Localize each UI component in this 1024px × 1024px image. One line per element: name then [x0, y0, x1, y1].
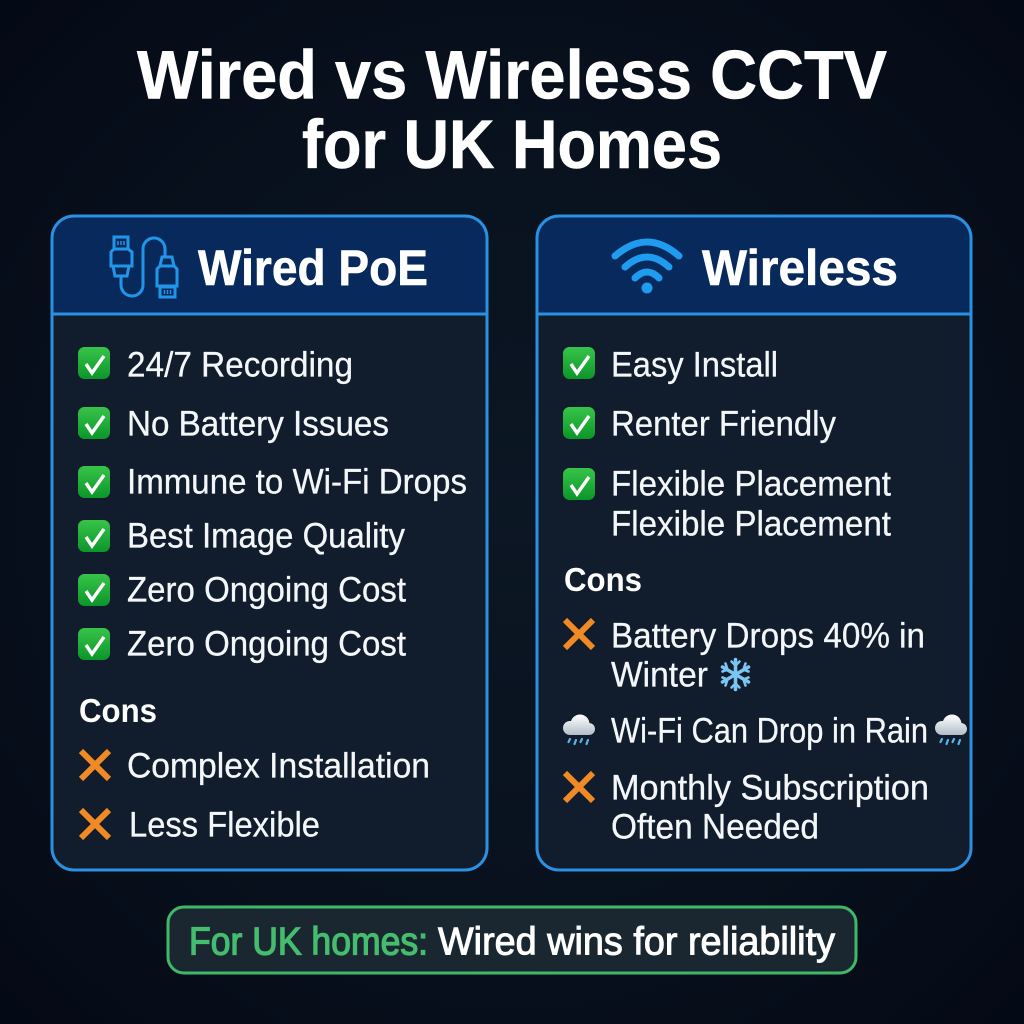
pro: flexible placement: Flexible Placement — [611, 504, 891, 544]
heading: wired PoE: Wired PoE — [198, 240, 428, 296]
callout: verdict: Wired wins for reliability — [438, 920, 835, 964]
con: monthly subscription: Often Needed — [611, 807, 819, 847]
pro: zero ongoing cost repeat: Zero Ongoing Cost — [127, 624, 406, 664]
con: battery drops in winter — [565, 616, 925, 695]
pro: easy install: Easy Install — [611, 345, 778, 385]
pro: best image quality: Best Image Quality — [127, 516, 405, 556]
callout: verdict — [168, 907, 856, 973]
title: for UK Homes — [302, 106, 722, 183]
con: monthly subscription — [565, 768, 929, 847]
pro: zero ongoing cost: Zero Ongoing Cost — [127, 570, 406, 610]
panel: wireless — [537, 216, 972, 870]
con: less flexible: Less Flexible — [129, 805, 320, 845]
title: Wired vs Wireless CCTV — [137, 36, 887, 114]
title — [137, 36, 887, 183]
con: Wi-Fi can drop in rain: Wi-Fi Can Drop in Rain — [611, 711, 928, 751]
pro: flexible placement: Flexible Placement — [611, 464, 891, 504]
pro: renter friendly: Renter Friendly — [611, 404, 836, 444]
heading: cons: Cons — [79, 692, 157, 729]
heading: cons: Cons — [564, 561, 642, 598]
icon: wifi — [615, 242, 679, 294]
con: monthly subscription: Monthly Subscription — [611, 768, 929, 808]
pro: flexible placement — [563, 464, 891, 544]
con: complex installation: Complex Installation — [127, 746, 430, 786]
icon: ethernet cable — [111, 237, 177, 297]
heading: wireless: Wireless — [702, 240, 898, 296]
pro: 24/7 recording: 24/7 Recording — [127, 345, 353, 385]
con: battery drops in winter: Winter — [611, 655, 708, 695]
icon: snowflake — [722, 660, 748, 690]
pro: immune to Wi-Fi drops: Immune to Wi-Fi Drops — [127, 462, 467, 502]
con: battery drops in winter: Battery Drops 40% in — [611, 616, 925, 656]
callout: verdict: For UK homes: — [189, 920, 428, 964]
panel: wired PoE — [52, 216, 487, 870]
pro: no battery issues: No Battery Issues — [127, 404, 389, 444]
